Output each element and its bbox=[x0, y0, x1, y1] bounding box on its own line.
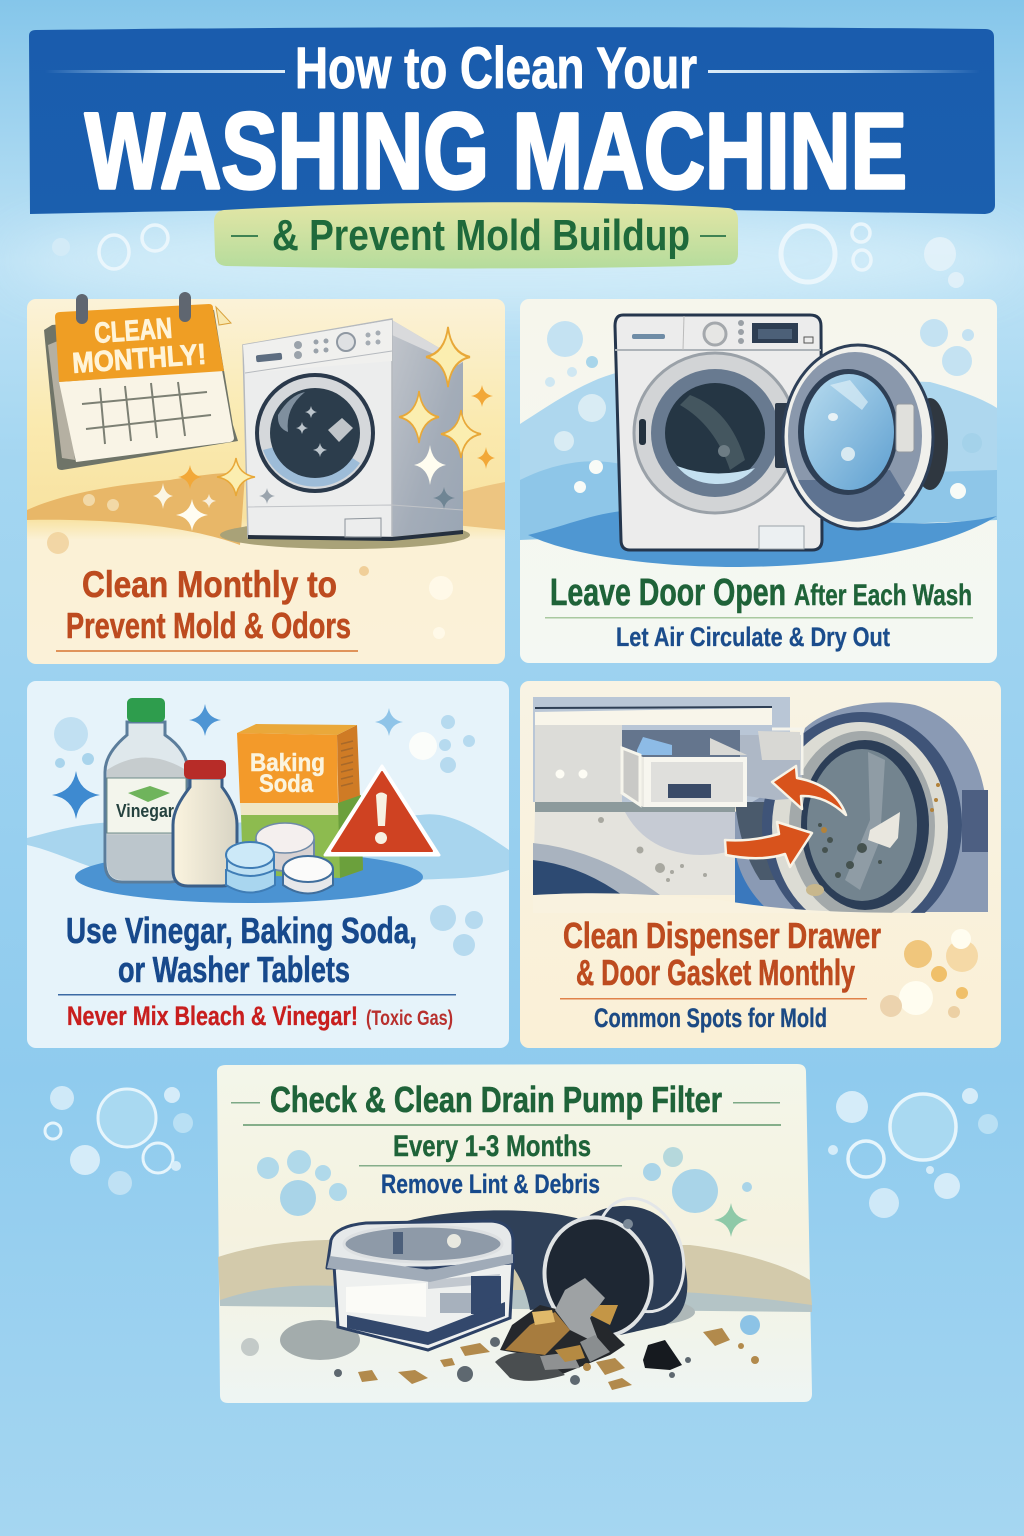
icon: calendar: CLEAN bbox=[93, 313, 173, 350]
background bubbles and sand bbox=[218, 1147, 812, 1360]
subheading: Remove Lint & Debris bbox=[381, 1169, 600, 1199]
icon: baking soda box: Soda bbox=[259, 770, 314, 798]
heading: Check & Clean Drain Pump Filter bbox=[270, 1079, 722, 1120]
heading line two: & Door Gasket Monthly bbox=[576, 952, 855, 993]
icon: vinegar bottle: Vinegar bbox=[116, 801, 174, 821]
subheading: Common Spots for Mold bbox=[594, 1003, 827, 1033]
water waves bbox=[520, 319, 997, 567]
subtitle pill bbox=[214, 202, 738, 268]
icon: clean washer bbox=[243, 319, 463, 541]
icon: pump filter cup bbox=[327, 1221, 513, 1350]
bubbles near title bbox=[52, 224, 964, 288]
subheading: Prevent Mold & Odors bbox=[66, 605, 351, 646]
sand wave bbox=[27, 473, 505, 639]
icon: washer with open door bbox=[615, 315, 948, 550]
panel: clean monthly bbox=[27, 292, 505, 664]
icon: calendar: MONTHLY! bbox=[71, 339, 207, 380]
panel: dispenser and gasket bbox=[520, 681, 1001, 1048]
arrow: to drawer bbox=[772, 766, 846, 815]
bubbles: right cluster bbox=[828, 1088, 998, 1218]
icon: baking soda box: Baking bbox=[250, 749, 325, 777]
title banner bbox=[29, 27, 995, 214]
icon: calendar bbox=[44, 292, 238, 470]
warning note: (Toxic Gas) bbox=[366, 1007, 453, 1030]
arrow: to gasket bbox=[725, 822, 812, 867]
heading: Use Vinegar, Baking Soda, bbox=[66, 910, 417, 951]
icon: warning triangle bbox=[325, 766, 439, 855]
frequency: Every 1-3 Months bbox=[393, 1130, 591, 1163]
water backdrop bbox=[27, 704, 509, 956]
icon: drain cylinder bbox=[531, 1187, 698, 1349]
icon: debris pile bbox=[334, 1278, 759, 1390]
stains bbox=[880, 929, 978, 1018]
illustration: dispenser drawer and door gasket bbox=[533, 697, 988, 913]
icon: baking soda box bbox=[237, 724, 363, 878]
icon: washer tablets bbox=[226, 823, 333, 894]
subheading: Let Air Circulate & Dry Out bbox=[616, 622, 890, 652]
heading: Clean Dispenser Drawer bbox=[563, 915, 881, 956]
icon: vinegar bottle bbox=[105, 698, 188, 882]
panel: leave door open bbox=[520, 299, 997, 663]
warning text: Never Mix Bleach & Vinegar! bbox=[67, 1001, 358, 1031]
heading line two: or Washer Tablets bbox=[118, 949, 350, 990]
panel: drain pump filter bbox=[217, 1064, 812, 1403]
title line 1: How to Clean Your bbox=[295, 36, 697, 101]
subtitle pill: & Prevent Mold Buildup bbox=[272, 211, 690, 260]
door gasket bbox=[735, 702, 988, 913]
panel: cleaning products bbox=[27, 681, 509, 1048]
sparkles bbox=[153, 327, 495, 531]
bubbles: left cluster bbox=[45, 1086, 193, 1195]
heading: Leave Door Open bbox=[550, 572, 786, 614]
icon: milk bottle bbox=[173, 760, 237, 886]
heading: Clean Monthly to bbox=[82, 564, 337, 605]
icon: dark hose bbox=[404, 1210, 625, 1310]
